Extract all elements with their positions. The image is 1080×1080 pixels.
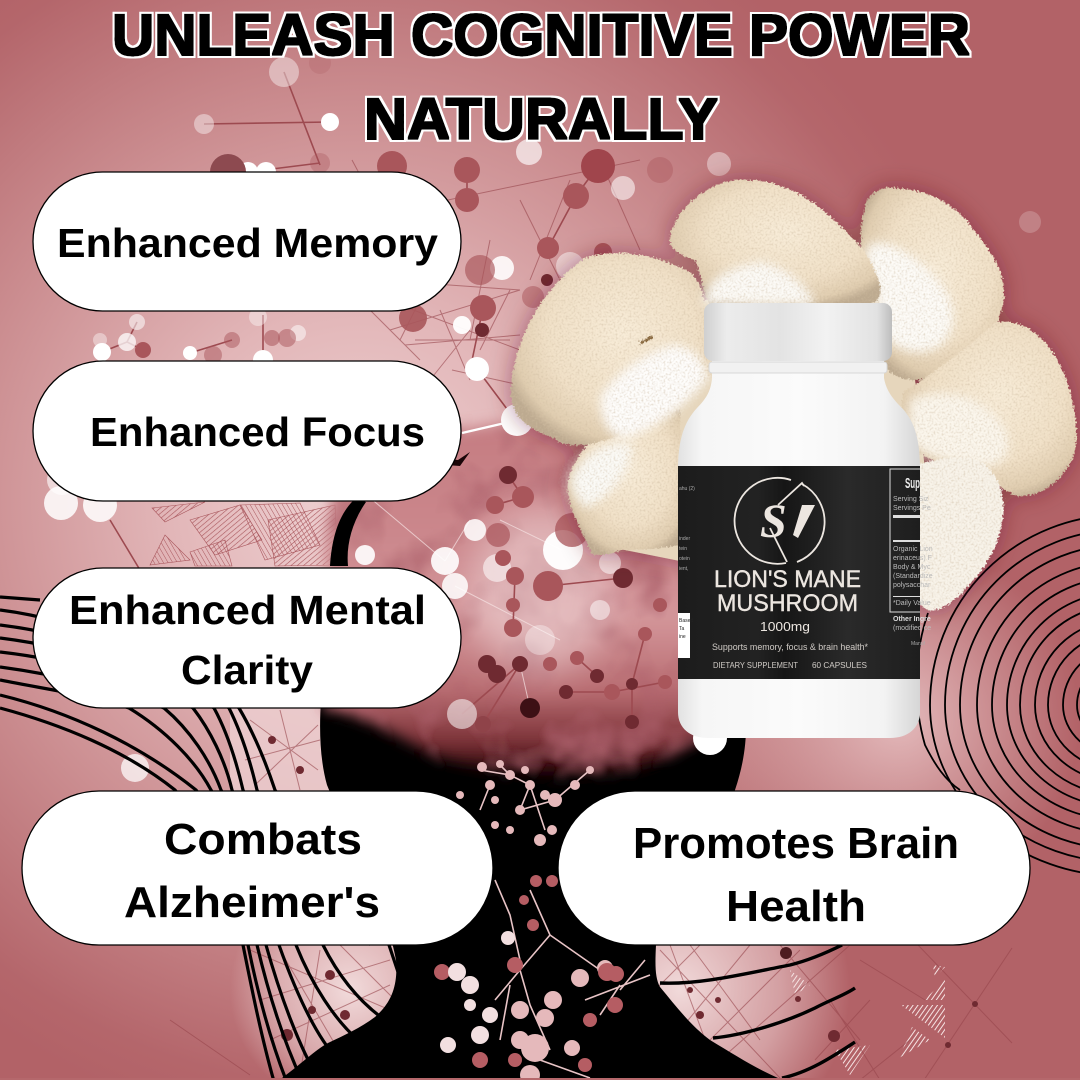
supplement facts panel [890, 469, 933, 647]
footer text: 60 CAPSULES [812, 660, 867, 670]
product label [678, 466, 933, 679]
supplement facts panel: Other Ingre [893, 616, 931, 623]
left side panel: otein [679, 556, 690, 562]
glowing x-ray brain region [325, 395, 710, 775]
pill: enhanced mental clarity [33, 568, 461, 708]
title: UNLEASH COGNITIVE POWER [112, 3, 970, 68]
supplement facts panel: Serving Siz [893, 496, 929, 503]
left side panel: inder [679, 536, 690, 542]
left side panel: ine [679, 634, 686, 640]
black curved lines bottom right [660, 945, 855, 1078]
background: hatched geometric shapes [150, 502, 338, 566]
title: NATURALLY [364, 87, 718, 152]
pill: promotes brain health [558, 791, 1030, 945]
pill: enhanced focus: Enhanced Focus [90, 409, 425, 455]
pill: enhanced mental clarity: Enhanced Mental [69, 587, 426, 633]
supplement facts panel: (modified ce [893, 625, 931, 632]
footer text: DIETARY SUPPLEMENT [713, 660, 798, 670]
background: thin web lines [170, 160, 1012, 1080]
supplement facts panel: (Standardize [893, 573, 933, 580]
mushroom: lower right [912, 458, 1004, 610]
left side panel [678, 486, 695, 658]
pill: combats alzheimer's: Combats [164, 815, 362, 864]
supplement facts panel: Body & Myc [893, 564, 931, 571]
footer text [713, 660, 867, 670]
molecule nodes: rose [135, 52, 673, 732]
pill: combats alzheimer's: Alzheimer's [124, 878, 380, 927]
logo mark: S [760, 495, 787, 548]
pill: promotes brain health: Promotes Brain [633, 819, 959, 868]
background: pale glow around lower neck [220, 700, 850, 1080]
supplement facts panel: Manuf [911, 641, 926, 647]
product name: MUSHROOM [717, 590, 858, 617]
supplement facts panel: Servings Pe [893, 505, 931, 512]
lion's mane mushroom cluster [511, 180, 1076, 610]
bottle cap [704, 303, 892, 361]
supplement facts panel: polysacchar [893, 582, 931, 589]
pill: combats alzheimer's [22, 791, 493, 945]
logo mark [735, 478, 825, 564]
bottle body [678, 360, 920, 738]
supplement facts panel: erinaceus) F [893, 555, 932, 562]
molecule nodes: pale [44, 57, 1041, 782]
concentric lines at right [917, 515, 1080, 876]
left side panel: ient, [679, 566, 688, 572]
pill: enhanced memory [33, 172, 461, 311]
product name [714, 566, 861, 617]
background: pale hatched triangles bottom right [790, 965, 945, 1075]
mushroom: top centre [670, 180, 880, 305]
background: glow right of bottle [720, 540, 1080, 900]
neck and head silhouette [282, 700, 778, 1078]
pill: enhanced memory: Enhanced Memory [57, 220, 438, 266]
pill: enhanced focus [33, 361, 461, 501]
black curved lines from left [0, 597, 398, 1080]
mushroom: large left [511, 253, 712, 445]
mushroom: lower left [568, 409, 682, 555]
supplement facts panel: *Daily Value [893, 600, 931, 607]
tagline: Supports memory, focus & brain health* [712, 642, 868, 653]
left side panel: ahu (2) [679, 486, 695, 492]
molecule bonds [102, 72, 665, 724]
supplement facts panel: Organic Lion [893, 546, 933, 553]
product name: LION'S MANE [714, 566, 861, 593]
left side panel: Based [679, 618, 693, 624]
left side panel: tein [679, 546, 687, 552]
mushroom base fill [600, 265, 925, 600]
pill: promotes brain health: Health [726, 882, 866, 931]
supplement bottle [678, 303, 933, 738]
supplement facts panel: Sup [905, 475, 920, 492]
bottom edge strip [0, 1078, 1080, 1080]
title [112, 3, 970, 152]
molecule nodes: dark [210, 154, 978, 1048]
bottle neck ring [709, 362, 887, 373]
dosage: 1000mg [760, 619, 810, 634]
mushroom: top right [861, 188, 1004, 380]
mushroom: right [901, 322, 1076, 496]
left side panel: Ta [679, 626, 684, 632]
pill: enhanced mental clarity: Clarity [181, 647, 313, 693]
small molecule tree on neck [434, 760, 650, 1080]
